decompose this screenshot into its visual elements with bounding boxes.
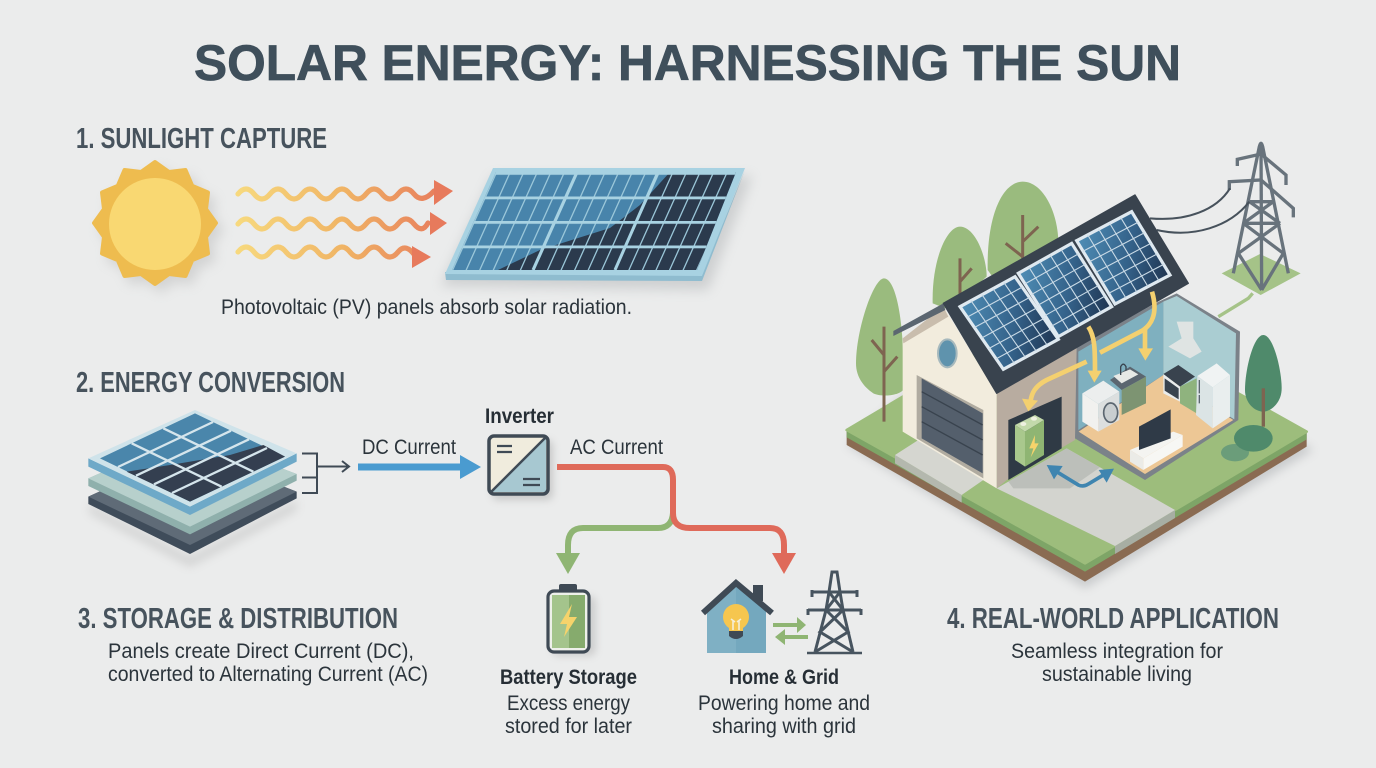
house walls <box>893 303 1077 488</box>
icon: panel layers <box>88 410 297 567</box>
icon: exchange arrows <box>773 617 808 645</box>
icon: sun <box>94 162 224 293</box>
illustration: isometric house <box>847 143 1313 588</box>
text: real-world application: Seamless integration for <box>1011 640 1223 663</box>
cutaway room <box>1075 293 1240 480</box>
arrow: to battery <box>556 513 673 574</box>
right tree and bushes <box>1221 335 1282 461</box>
label: home and grid <box>698 666 870 738</box>
bracket arrow <box>302 454 349 493</box>
label: battery storage: stored for later <box>505 715 632 738</box>
arrow: AC current to home <box>557 467 796 574</box>
text: real-world application: sustainable living <box>1042 663 1192 686</box>
platform <box>847 298 1307 582</box>
label: battery storage: Excess energy <box>507 692 630 715</box>
heading: real-world application: 4. REAL-WORLD APPLICATION <box>947 603 1279 635</box>
label: inverter: Inverter <box>485 405 554 428</box>
blue exchange arrow <box>1047 465 1114 486</box>
label: battery storage: Battery Storage <box>500 666 637 689</box>
tree trunks <box>872 215 1038 422</box>
label: home and grid: sharing with grid <box>712 715 856 738</box>
pylon <box>1150 143 1301 317</box>
roof <box>943 195 1188 393</box>
label: battery storage <box>500 666 637 738</box>
label: AC current: AC Current <box>570 436 663 459</box>
label: home and grid: Powering home and <box>698 692 870 715</box>
icon: grid pylon <box>807 572 862 653</box>
label: home and grid: Home & Grid <box>729 666 839 689</box>
text: storage and distribution: Panels create Direct Current (DC), <box>108 640 414 663</box>
solar panel <box>441 168 752 290</box>
heading: sunlight capture: 1. SUNLIGHT CAPTURE <box>76 123 327 155</box>
heading: storage and distribution: 3. STORAGE & DISTRIBUTION <box>78 603 398 635</box>
yellow energy arrows <box>1022 292 1154 411</box>
title: SOLAR ENERGY: HARNESSING THE SUN <box>194 35 1181 91</box>
label: DC current: DC Current <box>362 436 456 459</box>
trees behind house <box>856 182 1058 396</box>
caption: photovoltaic panels: Photovoltaic (PV) panels absorb solar radiation. <box>221 296 632 319</box>
text: real-world application <box>1011 640 1223 686</box>
icon: home and bulb <box>703 583 772 653</box>
icon: battery <box>548 584 596 656</box>
heading: energy conversion: 2. ENERGY CONVERSION <box>76 367 345 399</box>
sun rays <box>238 180 453 268</box>
arrow: DC current <box>358 455 481 479</box>
icon: inverter <box>489 436 553 500</box>
roof solar panels <box>960 212 1170 369</box>
text: storage and distribution <box>108 640 428 686</box>
home battery <box>1015 415 1044 467</box>
text: storage and distribution: converted to Alternating Current (AC) <box>108 663 428 686</box>
